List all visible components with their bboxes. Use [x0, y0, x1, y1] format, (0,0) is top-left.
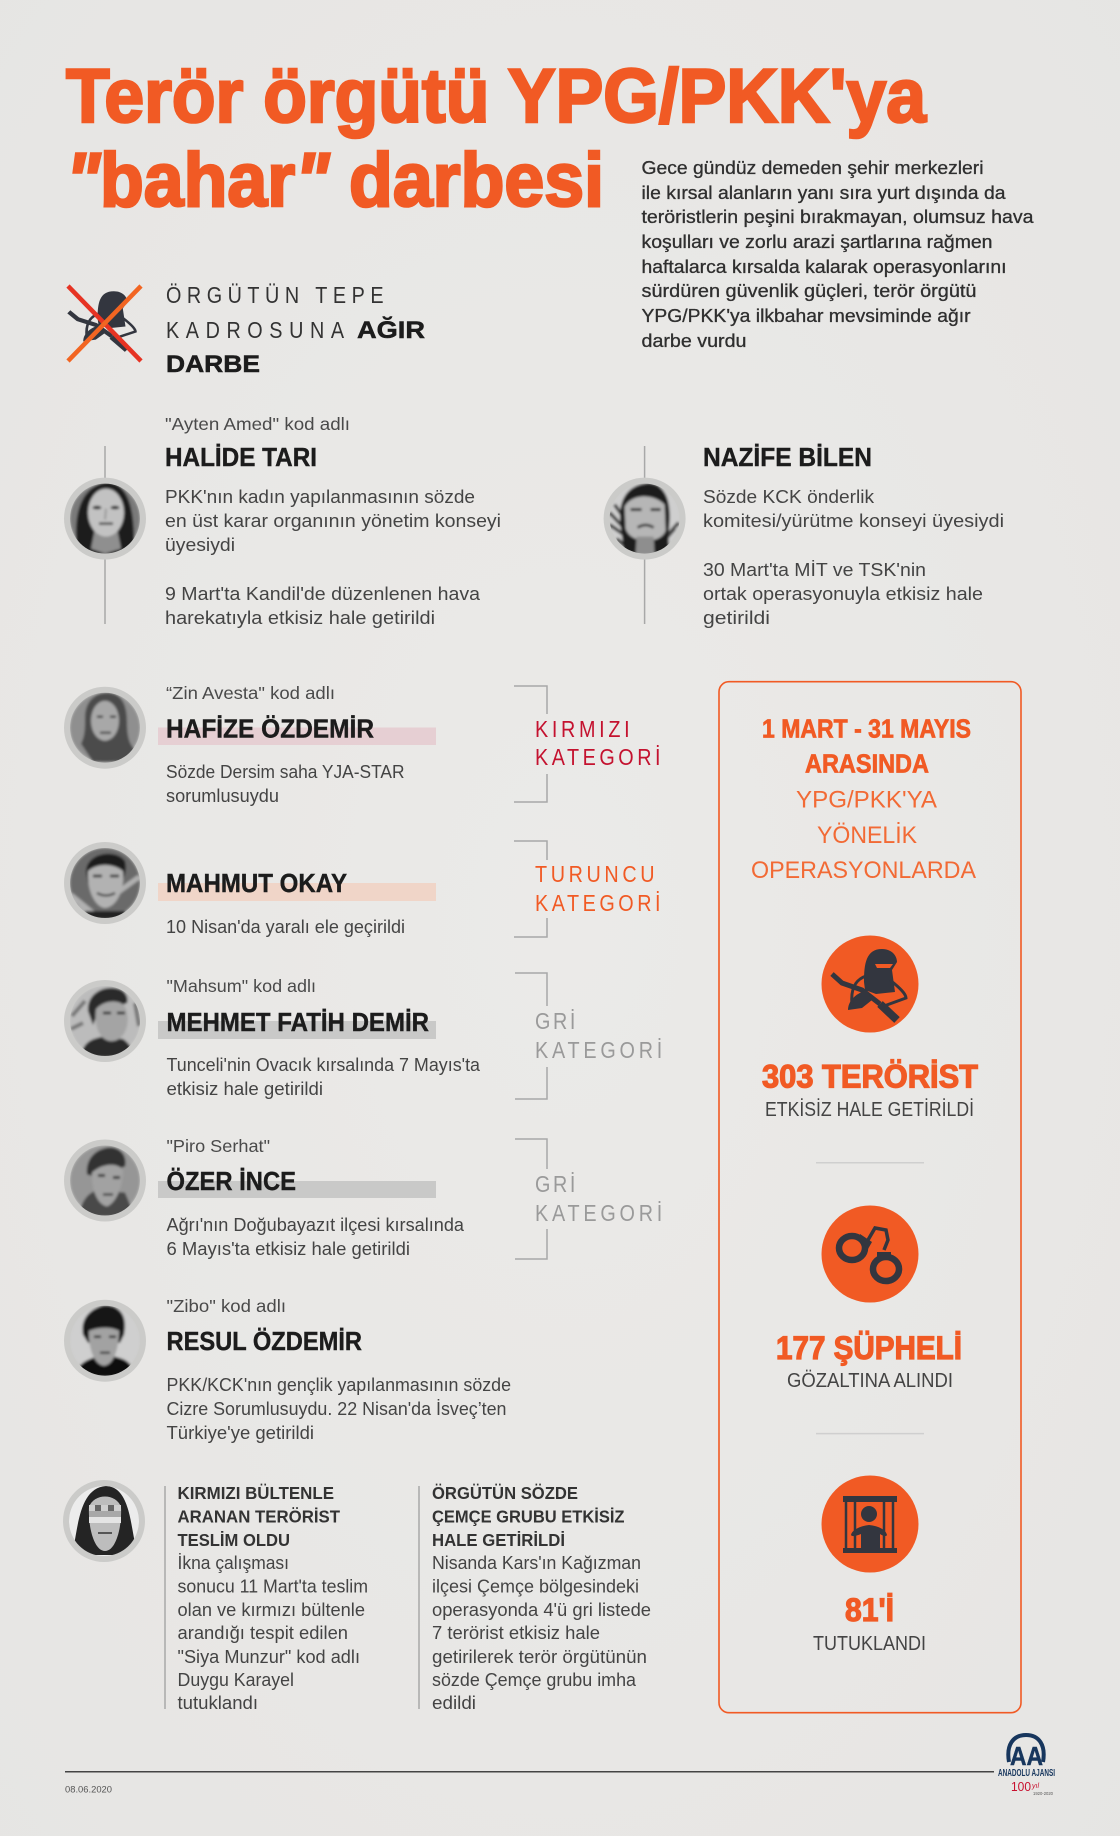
title: "bahar" darbesi	[66, 138, 604, 223]
intro text block: darbe vurdu	[642, 331, 746, 351]
profile: Nazife Bilen: komitesi/yürütme konseyi üyesiydi	[703, 511, 1004, 531]
profile: Mehmet Fatih Demir: MEHMET FATİH DEMİR	[166, 1007, 429, 1037]
intro text block: sürdüren güvenlik güçleri, terör örgütü	[642, 281, 976, 301]
text column: Çemçe grubu: ÖRGÜTÜN SÖZDE	[432, 1483, 578, 1503]
category bracket: Gri 1: KATEGORİ	[535, 1038, 662, 1063]
avatar: Hafize Özdemir	[64, 687, 146, 769]
text column: Kırmızı bülten: KIRMIZI BÜLTENLE	[178, 1483, 334, 1503]
profile: Halide Tarı: PKK'nın kadın yapılanmasının sözde	[165, 487, 475, 507]
category bracket: Gri 2: KATEGORİ	[535, 1201, 662, 1226]
profile: Özer İnce: "Piro Serhat"	[166, 1136, 270, 1156]
profile: Hafize Özdemir: Sözde Dersim saha YJA-STAR	[166, 762, 404, 782]
section heading: DARBE	[166, 351, 260, 378]
title: Terör örgütü YPG/PKK'ya	[66, 54, 927, 139]
profile: Hafize Özdemir: sorumlusuydu	[166, 786, 279, 806]
profile: Resul Özdemir	[166, 1296, 511, 1443]
icon: terrorist	[822, 936, 918, 1032]
profile: Halide Tarı: "Ayten Amed" kod adlı	[165, 414, 350, 434]
profile: Hafize Özdemir: “Zin Avesta" kod adlı	[166, 683, 335, 703]
icon: handcuffs	[822, 1206, 918, 1302]
category bracket: Kırmızı	[514, 686, 661, 802]
avatar: Resul Özdemir	[64, 1300, 146, 1382]
panel heading: 1 MART - 31 MAYIS	[762, 716, 971, 744]
icon: prisoner behind bars	[822, 1476, 918, 1572]
highlight band: grey category	[158, 1181, 436, 1198]
panel heading: ARASINDA	[805, 751, 929, 779]
profile: Mahmut Okay: MAHMUT OKAY	[166, 868, 347, 898]
profile: Özer İnce: 6 Mayıs'ta etkisiz hale getirildi	[166, 1239, 410, 1259]
profile: Mahmut Okay	[158, 868, 436, 937]
panel heading	[751, 716, 976, 884]
text column: Kırmızı bülten: sonucu 11 Mart'ta teslim	[178, 1577, 368, 1597]
highlight band: grey category	[158, 1021, 436, 1039]
text column: Kırmızı bülten: İkna çalışması	[178, 1553, 289, 1573]
profile: Halide Tarı: 9 Mart'ta Kandil'de düzenlenen hava	[165, 584, 481, 604]
section heading: ÖRGÜTÜN TEPE	[166, 283, 384, 308]
intro text block: teröristlerin peşini bırakmayan, olumsuz hava	[642, 207, 1035, 227]
profile: Mehmet Fatih Demir: Tunceli'nin Ovacık kırsalında 7 Mayıs'ta	[166, 1055, 481, 1075]
text column: Kırmızı bülten: arandığı tespit edilen	[178, 1623, 348, 1643]
stat: 303 terrorists: 303 TERÖRİST	[762, 1059, 978, 1095]
text column: Çemçe grubu: HALE GETİRİLDİ	[432, 1530, 565, 1550]
intro text block: YPG/PKK'ya ilkbahar mevsiminde ağır	[642, 306, 971, 326]
profile: Nazife Bilen: 30 Mart'ta MİT ve TSK'nin	[703, 560, 926, 580]
logo: Anadolu Ajansı	[998, 1735, 1055, 1796]
text column: Kırmızı bülten: "Siya Munzur" kod adlı	[178, 1647, 360, 1667]
text column: Kırmızı bülten: ARANAN TERÖRİST	[178, 1507, 340, 1527]
profile: Hafize Özdemir: HAFİZE ÖZDEMİR	[166, 714, 374, 744]
text column: Çemçe grubu: operasyonda 4'ü gri listede	[432, 1600, 651, 1620]
logo: Anadolu Ajansı: AA	[1010, 1741, 1043, 1771]
profile: Halide Tarı: HALİDE TARI	[165, 442, 317, 472]
highlight band: orange category	[158, 883, 436, 901]
stat: 81 arrested: 81'İ	[845, 1592, 894, 1628]
profile: Halide Tarı: üyesiydi	[165, 535, 235, 555]
stat: 303 terrorists	[762, 1059, 978, 1121]
avatar: blurred woman	[63, 1480, 145, 1562]
profile: Nazife Bilen: NAZİFE BİLEN	[703, 442, 872, 472]
profile: Halide Tarı: en üst karar organının yönetim konseyi	[165, 511, 501, 531]
category bracket: Kırmızı: KIRMIZI	[535, 717, 630, 742]
intro text block: Gece gündüz demeden şehir merkezleri	[642, 158, 984, 178]
text column: Çemçe grubu: getirilerek terör örgütünün	[432, 1647, 647, 1667]
icon: crossed-out terrorist	[68, 286, 141, 361]
text column: Kırmızı bülten: Duygu Karayel	[178, 1670, 294, 1690]
text column: Çemçe grubu: edildi	[432, 1693, 476, 1713]
divider: right profile line	[644, 446, 646, 624]
category bracket: Gri 2	[515, 1139, 662, 1259]
profile: Özer İnce: Ağrı'nın Doğubayazıt ilçesi kırsalında	[166, 1215, 465, 1235]
section heading: KADROSUNA	[166, 318, 345, 343]
category bracket: Gri 1	[515, 973, 662, 1099]
profile: Halide Tarı: harekatıyla etkisiz hale getirildi	[165, 608, 435, 628]
category bracket: Gri 2: GRİ	[535, 1172, 575, 1197]
intro text block: haftalarca kırsalda kalarak operasyonlarını	[642, 257, 1006, 277]
profile: Nazife Bilen: getirildi	[703, 608, 770, 628]
panel heading: YÖNELİK	[817, 822, 917, 849]
intro text block	[642, 158, 1035, 351]
stat: 177 suspects: GÖZALTINA ALINDI	[787, 1370, 953, 1392]
profile: Nazife Bilen	[703, 442, 1004, 628]
stat: 303 terrorists: ETKİSİZ HALE GETİRİLDİ	[765, 1098, 974, 1121]
stat: 81 arrested	[813, 1592, 926, 1655]
profile: Mehmet Fatih Demir: etkisiz hale getirildi	[166, 1079, 323, 1099]
stat: 177 suspects: 177 ŞÜPHELİ	[776, 1330, 962, 1366]
profile: Resul Özdemir: Türkiye'ye getirildi	[166, 1423, 314, 1443]
profile: Resul Özdemir: PKK/KCK'nın gençlik yapılanmasının sözde	[166, 1375, 511, 1395]
avatar: Özer İnce	[64, 1140, 146, 1222]
text column: Çemçe grubu: ÇEMÇE GRUBU ETKİSİZ	[432, 1507, 625, 1527]
profile: Nazife Bilen: Sözde KCK önderlik	[703, 487, 875, 507]
avatar: Mehmet Fatih Demir	[64, 980, 146, 1062]
avatar: Nazife Bilen	[604, 478, 686, 560]
profile: Halide Tarı	[165, 414, 501, 628]
category bracket: Kırmızı: KATEGORİ	[535, 745, 661, 770]
profile: Resul Özdemir: RESUL ÖZDEMİR	[166, 1326, 362, 1356]
highlight band: red category	[158, 728, 436, 745]
profile: Resul Özdemir: Cizre Sorumlusuydu. 22 Nisan'da İsveç’ten	[166, 1399, 506, 1419]
text column: Çemçe grubu: sözde Çemçe grubu imha	[432, 1670, 637, 1690]
date: 08.06.2020	[65, 1785, 112, 1796]
section heading: AĞIR	[357, 316, 425, 344]
profile: Resul Özdemir: "Zibo" kod adlı	[166, 1296, 286, 1316]
section heading	[166, 283, 425, 378]
category bracket: Turuncu: KATEGORİ	[535, 891, 661, 916]
stat: 81 arrested: TUTUKLANDI	[813, 1633, 926, 1655]
text column: Kırmızı bülten: olan ve kırmızı bültenle	[178, 1600, 365, 1620]
text column: Çemçe grubu	[419, 1483, 651, 1713]
avatar: Mahmut Okay	[64, 842, 146, 924]
intro text block: koşulları ve zorlu arazi şartlarına rağmen	[642, 232, 992, 252]
logo: Anadolu Ajansı: 100	[1011, 1779, 1031, 1794]
profile: Özer İnce: ÖZER İNCE	[166, 1166, 296, 1196]
category bracket: Turuncu: TURUNCU	[535, 862, 655, 887]
stat: 177 suspects	[776, 1330, 962, 1392]
panel: operations summary	[719, 682, 1021, 1713]
logo: Anadolu Ajansı: 1920-2020	[1033, 1791, 1053, 1796]
intro text block: ile kırsal alanların yanı sıra yurt dışında da	[642, 183, 1007, 203]
panel heading: OPERASYONLARDA	[751, 857, 976, 884]
text column: Kırmızı bülten	[165, 1483, 368, 1713]
profile: Mahmut Okay: 10 Nisan'da yaralı ele geçirildi	[166, 917, 405, 937]
profile: Nazife Bilen: ortak operasyonuyla etkisiz hale	[703, 584, 983, 604]
text column: Kırmızı bülten: TESLİM OLDU	[178, 1530, 290, 1550]
category bracket: Turuncu	[514, 841, 661, 937]
text column: Çemçe grubu: Nisanda Kars'ın Kağızman	[432, 1553, 641, 1573]
logo: Anadolu Ajansı: ANADOLU AJANSI	[998, 1768, 1055, 1779]
profile: Hafize Özdemir	[158, 683, 436, 806]
avatar: Halide Tarı	[64, 478, 146, 560]
panel heading: YPG/PKK'YA	[796, 787, 937, 814]
text column: Çemçe grubu: ilçesi Çemçe bölgesindeki	[432, 1577, 639, 1597]
profile: Mehmet Fatih Demir: "Mahsum" kod adlı	[166, 976, 316, 996]
text column: Kırmızı bülten: tutuklandı	[178, 1693, 258, 1713]
logo: Anadolu Ajansı: yıl	[1031, 1783, 1039, 1790]
category bracket: Gri 1: GRİ	[535, 1009, 575, 1034]
profile: Mehmet Fatih Demir	[158, 976, 481, 1099]
text column: Çemçe grubu: 7 terörist etkisiz hale	[432, 1623, 600, 1643]
profile: Özer İnce	[158, 1136, 465, 1259]
divider: left profile line	[104, 446, 106, 624]
title	[66, 54, 927, 223]
